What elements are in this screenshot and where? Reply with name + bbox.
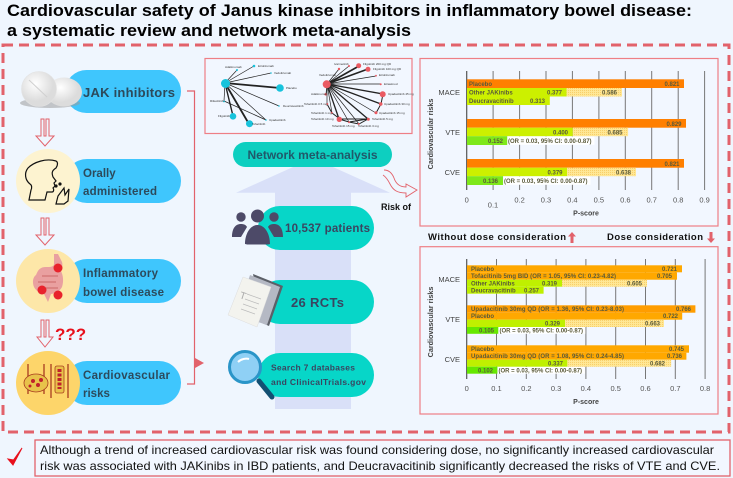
left column: orally administered step (16, 149, 181, 213)
CVE bars: (OR = 0.03, 95% CI: 0.00-0.87) (498, 368, 582, 374)
VTE bars (467, 119, 686, 145)
conclusion box: Although a trend of increased cardiovascular risk was found considering dose, no significantly increased cardiovascular (40, 443, 714, 457)
network right: Upadacitinib 30 mg (384, 102, 410, 106)
icon: check mark (8, 448, 22, 465)
VTE bars: 0.829 (666, 122, 682, 128)
squiggly arrow (383, 170, 417, 197)
CVE bars: Placebo (471, 347, 494, 353)
VTE bars: 0.722 (663, 314, 679, 320)
left column: orally administered step: Orally (83, 168, 116, 180)
conclusion box: risk was associated with JAKinibs in IBD patients, and Deucravacitinib significantly decreased the risks of VTE and CVE. (40, 459, 720, 473)
panel: chart with dose: MACE (438, 275, 460, 284)
network right: Upadacitinib 45 mg (388, 92, 414, 96)
CVE bars: 0.337 (548, 362, 564, 368)
network right: Etrolizumab (379, 73, 395, 77)
axis labels: 0.2 (514, 196, 525, 204)
axis labels: 0.3 (551, 384, 561, 393)
MACE bars: Placebo (471, 267, 494, 273)
panel: chart with dose: VTE (445, 315, 460, 324)
MACE bars (467, 79, 684, 105)
CVE bars: 0.821 (664, 162, 680, 168)
network left: Deucravacitinib (283, 104, 304, 108)
network right: Ivarmetinib (334, 62, 349, 66)
MACE bars: Deucravacitinib (471, 288, 516, 294)
network left (210, 64, 304, 127)
panel: chart without dose: CVE (445, 168, 460, 177)
icon: tablets (20, 72, 82, 108)
CVE bars: 0.682 (650, 362, 666, 368)
network left: Etrolizumab (258, 64, 274, 68)
VTE bars: (OR = 0.03, 95% CI: 0.00-0.87) (508, 139, 592, 145)
axis labels: 0 (465, 196, 469, 204)
left column: JAK inhibitors step (20, 70, 181, 113)
axis labels: 0.5 (594, 196, 604, 204)
CVE bars: 0.136 (483, 179, 499, 185)
panel: chart with dose: CVE (445, 355, 460, 364)
RCTs pill: 26 RCTs (291, 295, 344, 310)
MACE bars: Tofacitinib 5mg BID (OR = 1.05, 95% CI: 0.23-4.82) (471, 274, 616, 280)
CVE bars: Upadacitinib 30mg QD (OR = 1.08, 95% CI: 0.24-4.85) (471, 354, 624, 360)
network right: Upadacitinib 15 mg (379, 111, 405, 115)
conclusion box (35, 440, 730, 476)
VTE bars: 0.329 (545, 322, 561, 328)
VTE bars: Placebo (471, 314, 494, 320)
network right: Vedolizumab (319, 73, 337, 77)
network left: Tofacitinib (252, 122, 266, 126)
RCTs pill (228, 274, 374, 327)
axis labels: 0.4 (581, 384, 591, 393)
left column: cardiovascular risks step: risks (83, 388, 110, 400)
axis labels: 0.6 (640, 384, 651, 393)
axis labels: 0.7 (670, 384, 681, 393)
network meta-analysis pill (233, 142, 392, 167)
MACE bars: 0.821 (664, 82, 680, 88)
panel: chart without dose: MACE (438, 88, 460, 97)
CVE bars (467, 345, 689, 374)
CVE bars: (OR = 0.03, 95% CI: 0.00-0.87) (504, 179, 588, 185)
VTE bars: 0.685 (607, 130, 623, 136)
arrow (36, 119, 54, 146)
panel: chart without dose: VTE (445, 128, 460, 137)
label: risk of: Risk of (381, 202, 412, 212)
title: Cardiovascular safety of Janus kinase inhibitors in inflammatory bowel disease: (7, 1, 692, 20)
patients pill: 10,537 patients (285, 223, 370, 235)
patients pill (232, 206, 374, 250)
MACE bars (467, 265, 682, 294)
network left: Ritlecitinib (210, 99, 224, 103)
axis labels: 0.8 (700, 384, 710, 393)
MACE bars: 0.257 (524, 288, 540, 294)
network right: Tofacitinib 15 mg (332, 124, 355, 128)
network right: Filgotinib 200 mg QD (363, 62, 392, 66)
axis labels (465, 384, 710, 393)
network right: Etrasimod (384, 82, 398, 86)
label: without dose consideration: Without dose consideration (428, 232, 566, 243)
CVE bars: 0.638 (616, 170, 632, 176)
icon: intestine (33, 254, 63, 302)
panel: chart with dose: Cardiovascular risks (426, 287, 435, 357)
MACE bars: Deucravacitinib (469, 99, 514, 105)
icon: magnifier (230, 352, 272, 397)
VTE bars: 0.766 (676, 307, 692, 313)
MACE bars: 0.586 (602, 90, 618, 96)
CVE bars: 0.379 (548, 170, 563, 176)
axis labels: 0.1 (488, 200, 498, 210)
title: a systematic review and network meta-analysis (7, 21, 411, 40)
VTE bars: 0.663 (645, 322, 661, 328)
MACE bars: 0.721 (662, 267, 678, 273)
network right: Tofacitinib 10 mg (311, 117, 334, 121)
MACE bars: 0.605 (627, 282, 643, 288)
MACE bars: Other JAKinibs (469, 90, 513, 96)
label: dose consideration: Dose consideration (607, 232, 703, 243)
VTE bars: 0.400 (553, 130, 569, 136)
panel: chart with dose (420, 247, 718, 414)
axis labels: 0.7 (646, 196, 657, 204)
left column: inflammatory bowel disease step: bowel disease (83, 287, 164, 299)
network left: Adalimumab (225, 65, 242, 69)
axis labels: 0.4 (567, 196, 578, 204)
left column: cardiovascular risks step (16, 351, 181, 415)
VTE bars: (OR = 0.03, 95% CI: 0.00-0.87) (500, 328, 583, 334)
icon: documents: T (238, 290, 247, 303)
axis labels (465, 196, 710, 210)
MACE bars: 0.377 (547, 90, 563, 96)
left column: orally administered step: administered (83, 186, 157, 198)
icon: blood vessels (24, 364, 68, 398)
CVE bars: 0.745 (669, 347, 685, 353)
CVE bars: 0.102 (478, 368, 494, 374)
network left: Filgotinib (218, 114, 230, 118)
panel: networks (205, 58, 414, 134)
network left: Upadacitinib (269, 118, 286, 122)
network right: Adalimumab (311, 92, 328, 96)
network left: Placebo (286, 86, 297, 90)
MACE bars: 0.319 (542, 282, 558, 288)
search pill (230, 352, 374, 397)
panel: chart without dose (420, 58, 718, 226)
network left: Vedolizumab (274, 71, 292, 75)
axis labels: 0.5 (610, 384, 621, 393)
arrow (36, 218, 54, 245)
search pill: and ClinicalTrials.gov (271, 377, 366, 387)
bracket arrow (187, 91, 204, 384)
VTE bars: 0.105 (479, 328, 495, 334)
MACE bars: Placebo (469, 82, 492, 88)
left column: JAK inhibitors step: JAK inhibitors (83, 85, 175, 100)
panel: chart with dose: P-score (573, 399, 599, 406)
MACE bars: Other JAKinibs (471, 282, 515, 288)
panel: chart without dose: P-score (573, 210, 599, 218)
VTE bars (467, 305, 695, 334)
network right: Tofacitinib 0.5 mg (304, 102, 328, 106)
title (7, 1, 692, 40)
MACE bars: 0.313 (530, 99, 546, 105)
axis labels: 0.8 (673, 196, 683, 204)
MACE bars: 0.705 (657, 274, 673, 280)
axis labels: 0 (465, 384, 469, 393)
axis labels: 0.2 (521, 384, 532, 393)
network right: Tofacitinib 5 mg (372, 117, 393, 121)
axis labels: 0.6 (620, 196, 631, 204)
arrow (37, 320, 53, 347)
CVE bars (467, 159, 684, 185)
VTE bars: Upadacitinib 30mg QD (OR = 1.36, 95% CI: 0.23-8.03) (471, 307, 624, 313)
axis labels: 0.9 (699, 196, 710, 204)
network meta-analysis pill: Network meta-analysis (248, 148, 378, 162)
panel: chart without dose: Cardiovascular risks (426, 99, 435, 169)
VTE bars: 0.152 (488, 139, 504, 145)
icon: people (232, 210, 283, 244)
search pill: Search 7 databases (271, 362, 355, 372)
left column: inflammatory bowel disease step (16, 249, 181, 313)
network right: Tofacitinib 1 mg (311, 111, 332, 115)
network right: Filgotinib 100 mg QD (373, 67, 402, 71)
axis labels: 0.1 (491, 384, 502, 393)
left column: cardiovascular risks step: Cardiovascular (83, 370, 171, 382)
network right: Tofacitinib 3 mg (358, 124, 379, 128)
question marks: ??? (55, 325, 86, 344)
icon: documents (228, 274, 283, 327)
left column: inflammatory bowel disease step: Inflammatory (83, 268, 159, 280)
network right (304, 62, 414, 128)
CVE bars: 0.736 (667, 354, 683, 360)
axis labels: 0.3 (541, 196, 551, 204)
big upward arrow (236, 158, 390, 409)
icon: head and hand (26, 160, 69, 204)
